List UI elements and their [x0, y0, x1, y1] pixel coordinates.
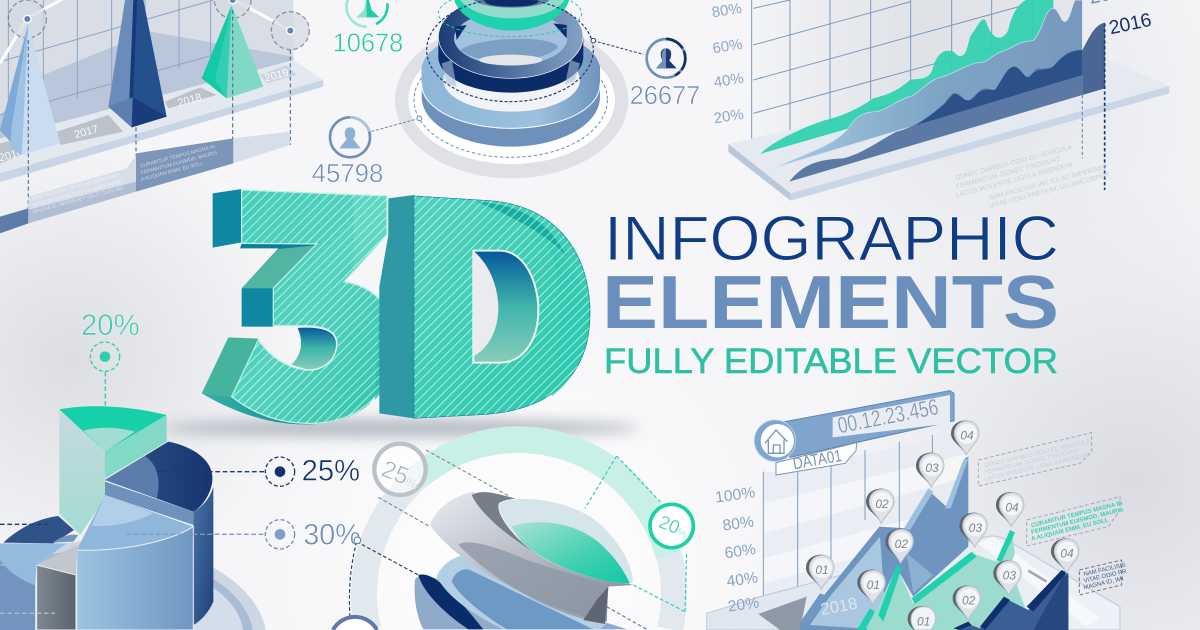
panel: area chart, top right: [711, 0, 1169, 210]
subtitle: FULLY EDITABLE VECTOR: FULLY EDITABLE VECTOR: [604, 342, 1058, 381]
axis labels: 100%: [714, 484, 756, 507]
lower caption bands: [0, 132, 290, 233]
base shadow ring: [395, 22, 628, 178]
callout teal: [1027, 497, 1124, 546]
guide lines: [1082, 23, 1105, 190]
label 30%: 30%: [303, 518, 361, 551]
pin 04: [1051, 538, 1079, 573]
base plate: [0, 541, 266, 630]
label 25%: 25%: [302, 455, 360, 488]
counter 26677: 26677: [630, 82, 700, 110]
caption text: FERMENTUM EUISMOD, MAURIS: [140, 150, 218, 176]
pin 03: [959, 513, 987, 547]
letter D: [379, 195, 590, 418]
partial badge bottom left: [333, 617, 377, 630]
top bar: [785, 391, 954, 457]
pin 04: [951, 420, 979, 455]
year labels: 2018: [176, 92, 203, 110]
navy area series: [789, 23, 1105, 182]
caption text: LACUS MOLESTIE LIGULA BIBENDUM: [955, 161, 1073, 199]
series label 2016: 2016: [1107, 10, 1153, 39]
top bar: 00.12.23.456: [835, 393, 940, 438]
trend line: [0, 0, 67, 63]
pin 02: [866, 489, 894, 523]
counter 45798: 45798: [312, 160, 383, 188]
gauge badge 25%: 25%: [378, 456, 424, 495]
title shadow: [160, 419, 640, 437]
teal slice: [59, 406, 167, 535]
pin 03: 03: [925, 461, 939, 475]
callout teal: CURABITUR TEMPUS MAGNA IN: [1031, 501, 1123, 529]
axis labels: 20%: [713, 106, 745, 127]
axis labels: 40%: [713, 70, 745, 91]
counter icon 10678: [347, 0, 387, 27]
counter 10678: 10678: [333, 30, 403, 58]
callout navy: NAM FACILISIS: [1083, 562, 1126, 578]
pyramid navy: [108, 0, 167, 127]
chart wall: [0, 0, 293, 140]
pyramid light blue: [0, 23, 60, 155]
counter icon 45798: [330, 117, 370, 157]
caption text: A ALIQUAM ENIM, EU SOLL: [140, 160, 204, 183]
year label: 2018: [819, 594, 859, 619]
navy mountain series: [953, 570, 1068, 630]
mid blue area series: [776, 0, 1082, 167]
wall area shading: [0, 32, 293, 140]
caption text: NAM FACILISIS VEL EX AC IMPERDIET: [31, 173, 121, 202]
left blue slice: [0, 516, 78, 630]
caption text: CURABITUR TEMPUS MAGNA IN: [140, 144, 216, 170]
teal mountain series: [857, 530, 1033, 630]
marker 20%: [90, 342, 120, 371]
navy ring: [438, 0, 583, 93]
panel: line chart with pins, bottom right: [707, 391, 1128, 630]
connector node: [354, 537, 361, 544]
caption text: DONEC DAPIBUS ODIO EU VEHICULA: [955, 144, 1073, 182]
callout grey: DONEC DAPIBUS ODIO EU VEHICULA: [984, 439, 1091, 469]
pyramid teal: [202, 5, 263, 98]
teal area series: [760, 0, 1063, 154]
callout grey: [978, 433, 1092, 486]
chart wall: [763, 433, 968, 613]
pin 01: [806, 555, 834, 589]
counter icon 26677: [647, 39, 685, 78]
wall bands: [763, 453, 968, 583]
leader lines: [0, 372, 265, 613]
3D lettering: [202, 189, 590, 424]
gauge badge 20%: [650, 504, 693, 548]
teal cap: [499, 499, 633, 583]
pin 01: [857, 570, 885, 604]
axis labels: 60%: [711, 36, 744, 57]
pin 01: 01: [815, 563, 829, 577]
pin 01 cropped at frame edge: 01: [917, 614, 930, 628]
caption text: NAM FACILISIS VEL EX AC IMPERDIET: [989, 164, 1108, 202]
dashed orbit: [427, 0, 593, 102]
guide lines: [28, 10, 290, 223]
callout navy: VITAE ODIO PR: [1083, 569, 1128, 585]
callout teal: FERMENTUM EUISMOD, MAURIS: [1031, 507, 1124, 536]
dashed connectors: [349, 450, 687, 629]
panel: stacked rings with user counters, top centre: [312, 0, 700, 188]
caption text: FERMENTUM. DONEC TINCIDUNT: [955, 156, 1061, 191]
axis labels: 60%: [724, 541, 757, 562]
axis labels: 40%: [726, 569, 759, 591]
grid lines: [0, 0, 213, 115]
axis labels: 20%: [727, 594, 760, 616]
callout navy: [1079, 560, 1128, 595]
panel: exploded sphere with ring gauge, bottom centre: [333, 439, 693, 630]
connector to 45798: [369, 116, 422, 132]
pin 04: 04: [960, 429, 974, 443]
pin 04: 04: [1005, 500, 1019, 514]
navy slice: [105, 442, 213, 625]
pin 03: [993, 560, 1021, 595]
gauge badge 20%: 20%: [656, 511, 692, 542]
grid lines: [763, 435, 932, 612]
pin 02: [885, 529, 913, 563]
title: ELEMENTS: ELEMENTS: [602, 260, 1059, 344]
caption text: [31, 144, 218, 215]
bottom ring: [422, 30, 600, 147]
pin 02: 02: [875, 497, 889, 511]
callout navy: MAGNA ID, IMI: [1083, 576, 1125, 591]
panel: 3D pie chart, bottom left: [0, 309, 361, 630]
label 20%: 20%: [81, 309, 140, 342]
axis labels: 80%: [722, 513, 755, 535]
callout grey: LACUS MOLESTIE LIGULA BIBENDUM: [984, 453, 1090, 483]
pin 02: 02: [895, 537, 908, 551]
floor platform: [0, 60, 323, 173]
pin 02: 02: [962, 594, 976, 608]
ring gauge teal arc: [422, 440, 668, 555]
pin 03: 03: [1003, 569, 1016, 583]
axis labels: [711, 0, 745, 127]
caption text: [955, 144, 1110, 210]
callout teal: A ALIQUAM ENIM, EU SOLL: [1031, 518, 1109, 543]
pin 01 cropped at frame edge: [908, 606, 936, 630]
tag DATA01: DATA01: [791, 446, 843, 473]
dark crescent: [472, 492, 557, 565]
connector to 26677: [591, 38, 643, 54]
year strips: [0, 65, 297, 163]
teal ring: [453, 0, 570, 31]
floor plate: [728, 58, 1169, 201]
data point markers: [8, 0, 309, 50]
axis labels: 80%: [711, 0, 743, 21]
callout grey: FERMENTUM. DONEC TINCIDUNT: [984, 448, 1080, 476]
year labels: 2019: [263, 67, 290, 85]
caption text: VITAE ODIO PRETIUM, ULLAMCORPER: [32, 179, 124, 209]
gauge badge 25%: [374, 444, 426, 495]
tray: [707, 536, 1120, 630]
ring gauge: [364, 439, 674, 629]
panel: pyramid bar chart, top left: [0, 0, 323, 233]
marker 30%: [265, 520, 295, 549]
icon: home badge: [754, 420, 796, 461]
blue mountain series: [798, 457, 968, 630]
year labels: 2017: [73, 123, 100, 141]
middle band: [430, 492, 633, 624]
pin 01: 01: [867, 578, 880, 592]
grey slice: [37, 545, 77, 630]
caption text: MAGNA ID, IMPERDIET VELIT, DUIS VEL: [32, 185, 125, 215]
lower sphere: [415, 553, 627, 629]
letter 3: [202, 189, 395, 424]
pin 03: [916, 453, 944, 487]
caption text: VITAE ODIO PRETIUM, ULLAMCORPER: [989, 171, 1110, 210]
pin 03: 03: [969, 521, 982, 535]
pin 04: [996, 492, 1024, 527]
light blue slice: [77, 495, 193, 630]
year labels: [0, 67, 290, 165]
pin 02: [953, 585, 981, 620]
wall and grid: [752, 0, 1082, 144]
title: INFOGRAPHIC: INFOGRAPHIC: [604, 204, 1059, 274]
marker 25%: [265, 457, 295, 486]
axis labels: [714, 484, 760, 616]
pin 04: 04: [1060, 547, 1074, 561]
